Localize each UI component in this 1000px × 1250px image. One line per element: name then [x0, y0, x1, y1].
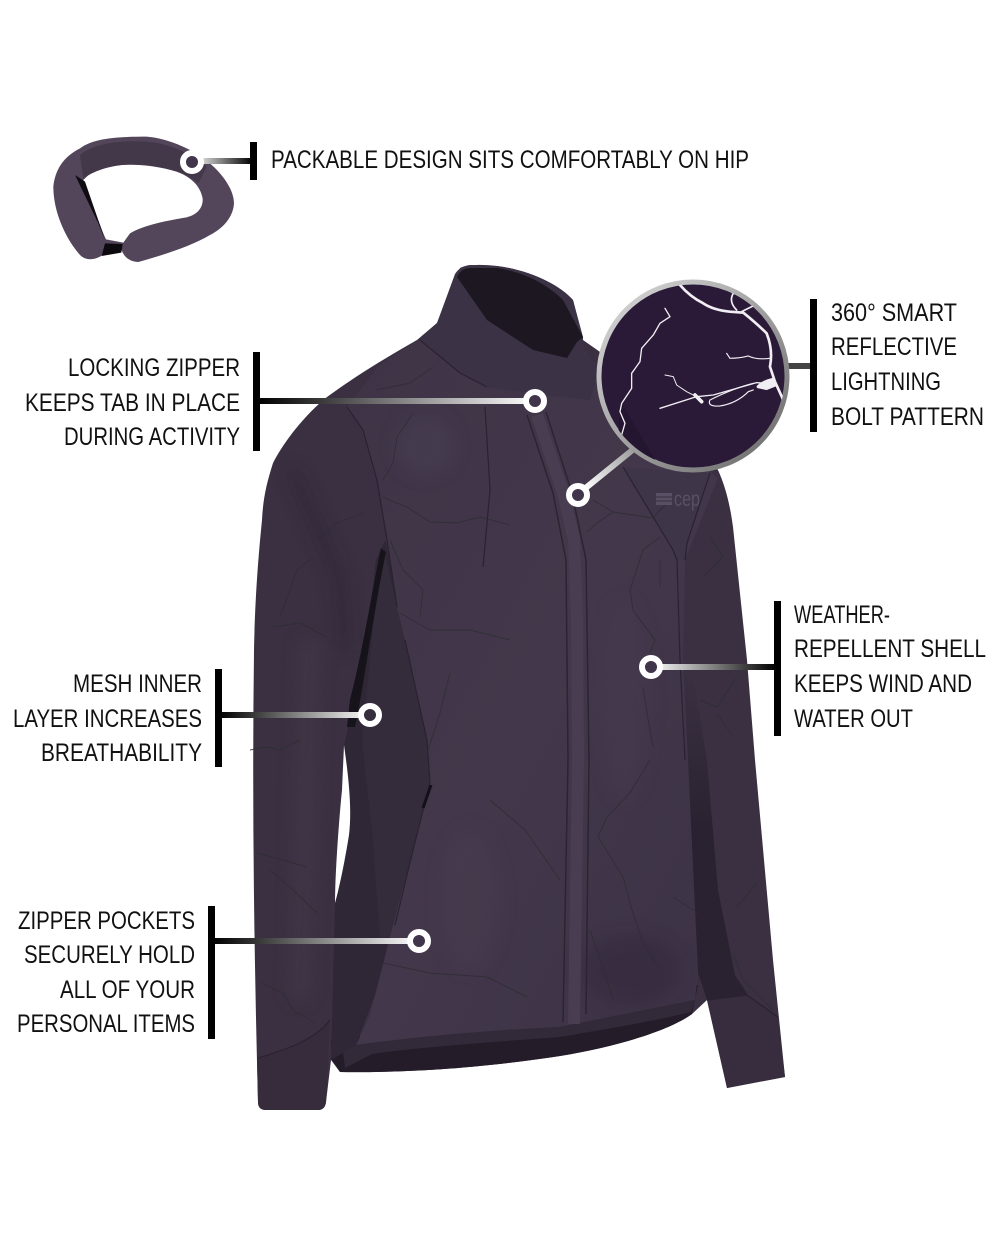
jacket reflective pattern — [250, 367, 773, 1023]
leader to bar — [788, 363, 812, 369]
leader line — [258, 398, 535, 404]
jacket collar inner lining — [457, 268, 583, 358]
callout: mesh inner layer — [13, 669, 379, 767]
bar — [208, 906, 215, 1039]
white gap between sleeve and body — [335, 745, 350, 903]
logo on jacket — [656, 488, 700, 511]
logo on jacket: cep — [674, 488, 700, 511]
jacket silhouette — [253, 265, 785, 1110]
jacket side panel — [331, 540, 430, 1060]
label — [831, 299, 984, 431]
label: DURING ACTIVITY — [64, 423, 240, 451]
leader line — [213, 938, 419, 944]
jacket hem band — [343, 1000, 695, 1068]
label — [17, 907, 195, 1038]
jacket left cuff — [257, 1020, 330, 1110]
jacket collar — [420, 265, 600, 400]
jacket front body — [347, 340, 718, 1045]
label: ALL OF YOUR — [60, 976, 195, 1004]
jacket pocket zip pull — [423, 785, 431, 808]
label: LIGHTNING — [831, 368, 941, 396]
callout: reflective lightning pattern — [569, 282, 984, 504]
jacket — [250, 265, 785, 1110]
leader line — [192, 158, 252, 164]
leader line — [651, 664, 776, 670]
callout: packable design — [183, 142, 749, 180]
marker — [361, 706, 379, 724]
jacket mesh panel — [362, 547, 430, 937]
label: KEEPS TAB IN PLACE — [25, 389, 240, 417]
jacket right cuff — [707, 995, 785, 1088]
jacket zipper — [527, 412, 589, 1024]
jacket hem lining — [331, 985, 698, 1072]
packable jacket pouch — [53, 137, 234, 262]
leader from lens to marker — [577, 448, 635, 495]
callout: zipper pockets — [17, 906, 428, 1039]
armpit shadow — [347, 548, 386, 727]
marker — [183, 153, 201, 171]
label: SECURELY HOLD — [24, 941, 195, 969]
bar — [774, 601, 781, 736]
label — [13, 670, 202, 767]
jacket logo patch — [623, 467, 710, 560]
label: WATER OUT — [794, 705, 913, 733]
marker — [526, 392, 544, 410]
jacket right underarm panel — [683, 670, 748, 1000]
label: LAYER INCREASES — [13, 705, 202, 733]
bar — [215, 669, 222, 767]
lightning bolts — [620, 285, 783, 435]
callout: locking zipper — [25, 352, 544, 451]
label: PERSONAL ITEMS — [17, 1010, 195, 1038]
bar — [810, 299, 817, 432]
bar — [253, 352, 260, 451]
label: WEATHER- — [794, 601, 890, 629]
label: LOCKING ZIPPER — [68, 354, 240, 382]
label: BREATHABILITY — [41, 739, 202, 767]
label: 360° SMART — [831, 299, 957, 327]
label: REFLECTIVE — [831, 333, 957, 361]
marker — [410, 932, 428, 950]
marker — [569, 486, 587, 504]
magnified lens — [599, 282, 787, 470]
callout: weather-repellent shell — [642, 601, 986, 736]
leader line — [220, 712, 370, 718]
jacket seams — [258, 340, 778, 1058]
label: ZIPPER POCKETS — [18, 907, 195, 935]
label: PACKABLE DESIGN SITS COMFORTABLY ON HIP — [271, 146, 749, 174]
bar — [250, 142, 257, 180]
marker — [642, 658, 660, 676]
label: MESH INNER — [73, 670, 202, 698]
label — [25, 354, 240, 451]
label — [794, 601, 986, 733]
jacket shading — [292, 415, 680, 1005]
